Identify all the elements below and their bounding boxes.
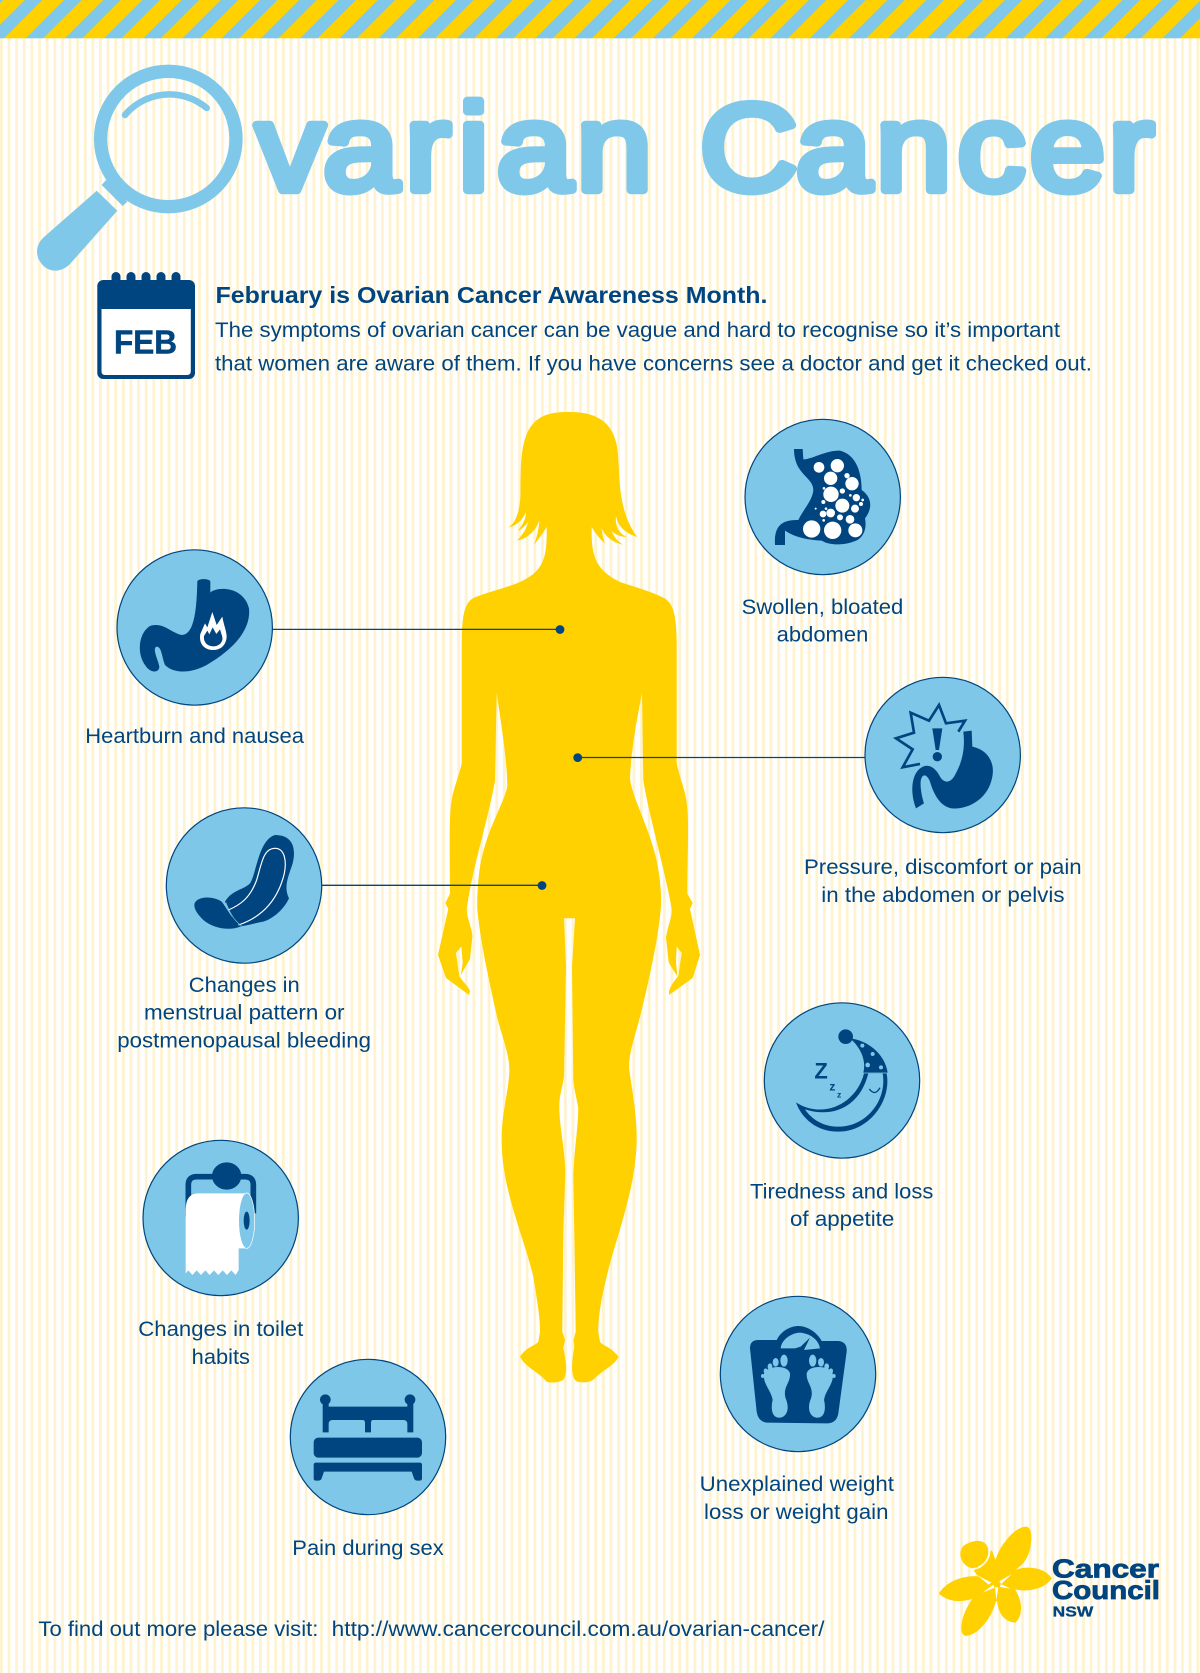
- symptom: tiredness and loss of appetite: [750, 1003, 933, 1231]
- icon: daffodil: [940, 1528, 1051, 1635]
- intro text block: February is Ovarian Cancer Awareness Month.: [216, 282, 768, 308]
- label: menstrual pattern or: [144, 1001, 344, 1025]
- footer link text: http://www.cancercouncil.com.au/ovarian-cancer/: [332, 1617, 825, 1641]
- label: Tiredness and loss: [750, 1179, 933, 1203]
- icon: sleeping moon with nightcap: z: [837, 1089, 842, 1099]
- title text: varian: [256, 80, 652, 217]
- footer link text: To find out more please visit:: [38, 1617, 318, 1641]
- label: in the abdomen or pelvis: [821, 883, 1064, 907]
- icon: bathroom scale with feet: [750, 1326, 847, 1423]
- Cancer Council NSW logo: [940, 1528, 1160, 1635]
- icon: sanitary pad: [194, 835, 294, 929]
- connector: heartburn to chest: [272, 625, 564, 634]
- label: Changes in: [189, 973, 300, 997]
- label: [700, 1472, 894, 1524]
- intro text block: The symptoms of ovarian cancer can be vague and hard to recognise so it’s important: [215, 318, 1060, 342]
- label: postmenopausal bleeding: [117, 1028, 371, 1052]
- title text: [256, 80, 1154, 217]
- icon: sleeping moon with nightcap: [796, 1029, 888, 1132]
- label: [117, 973, 371, 1052]
- icon: stomach with pain burst: [896, 705, 993, 809]
- symptom: unexplained weight change: [700, 1296, 894, 1524]
- icon: toilet roll on holder: [186, 1162, 255, 1275]
- label: [742, 595, 903, 647]
- wordmark: [1052, 1554, 1160, 1621]
- wordmark: NSW: [1053, 1605, 1094, 1621]
- icon: February calendar: FEB: [114, 323, 177, 360]
- footer link text: [38, 1617, 825, 1641]
- connector: menstrual changes to pelvis: [321, 881, 546, 890]
- wordmark: Council: [1052, 1575, 1160, 1605]
- label: Unexplained weight: [700, 1472, 894, 1496]
- title: Ovarian Cancer: [37, 71, 1154, 271]
- symptom: swollen, bloated abdomen: [742, 419, 903, 647]
- label: [804, 855, 1082, 907]
- title text: Cancer: [700, 80, 1154, 217]
- intro text block: [215, 282, 1092, 376]
- label: [138, 1317, 303, 1369]
- icon: magnifying glass as letter O: [37, 71, 236, 271]
- icon: stomach with flame: [140, 579, 249, 672]
- label: Pain during sex: [292, 1536, 444, 1560]
- label: abdomen: [777, 623, 868, 647]
- intro text block: that women are aware of them. If you have concerns see a doctor and get it checked out.: [215, 352, 1092, 376]
- symptom: changes in menstrual pattern: [117, 808, 371, 1052]
- symptom: pressure, discomfort or pain: [804, 677, 1082, 907]
- label: Swollen, bloated: [742, 595, 903, 619]
- icon: sleeping moon with nightcap: Z: [814, 1059, 828, 1084]
- icon: bed: [314, 1394, 422, 1481]
- label: Pressure, discomfort or pain: [804, 855, 1082, 879]
- label: of appetite: [790, 1207, 894, 1231]
- icon: sleeping moon with nightcap: z: [829, 1079, 835, 1093]
- label: loss or weight gain: [704, 1500, 888, 1524]
- symptom: heartburn and nausea: [85, 550, 304, 748]
- symptom: pain during sex: [290, 1359, 446, 1560]
- female body silhouette: [438, 412, 700, 1383]
- connector: pressure to abdomen: [573, 753, 866, 762]
- icon: February calendar: [97, 272, 195, 379]
- label: Heartburn and nausea: [85, 724, 304, 748]
- symptom: changes in toilet habits: [138, 1140, 303, 1369]
- wordmark: Cancer: [1052, 1554, 1159, 1584]
- label: [750, 1179, 933, 1231]
- icon: bloated stomach: [775, 449, 870, 545]
- label: Changes in toilet: [138, 1317, 303, 1341]
- label: habits: [192, 1345, 250, 1369]
- striped top band: [0, 0, 1200, 38]
